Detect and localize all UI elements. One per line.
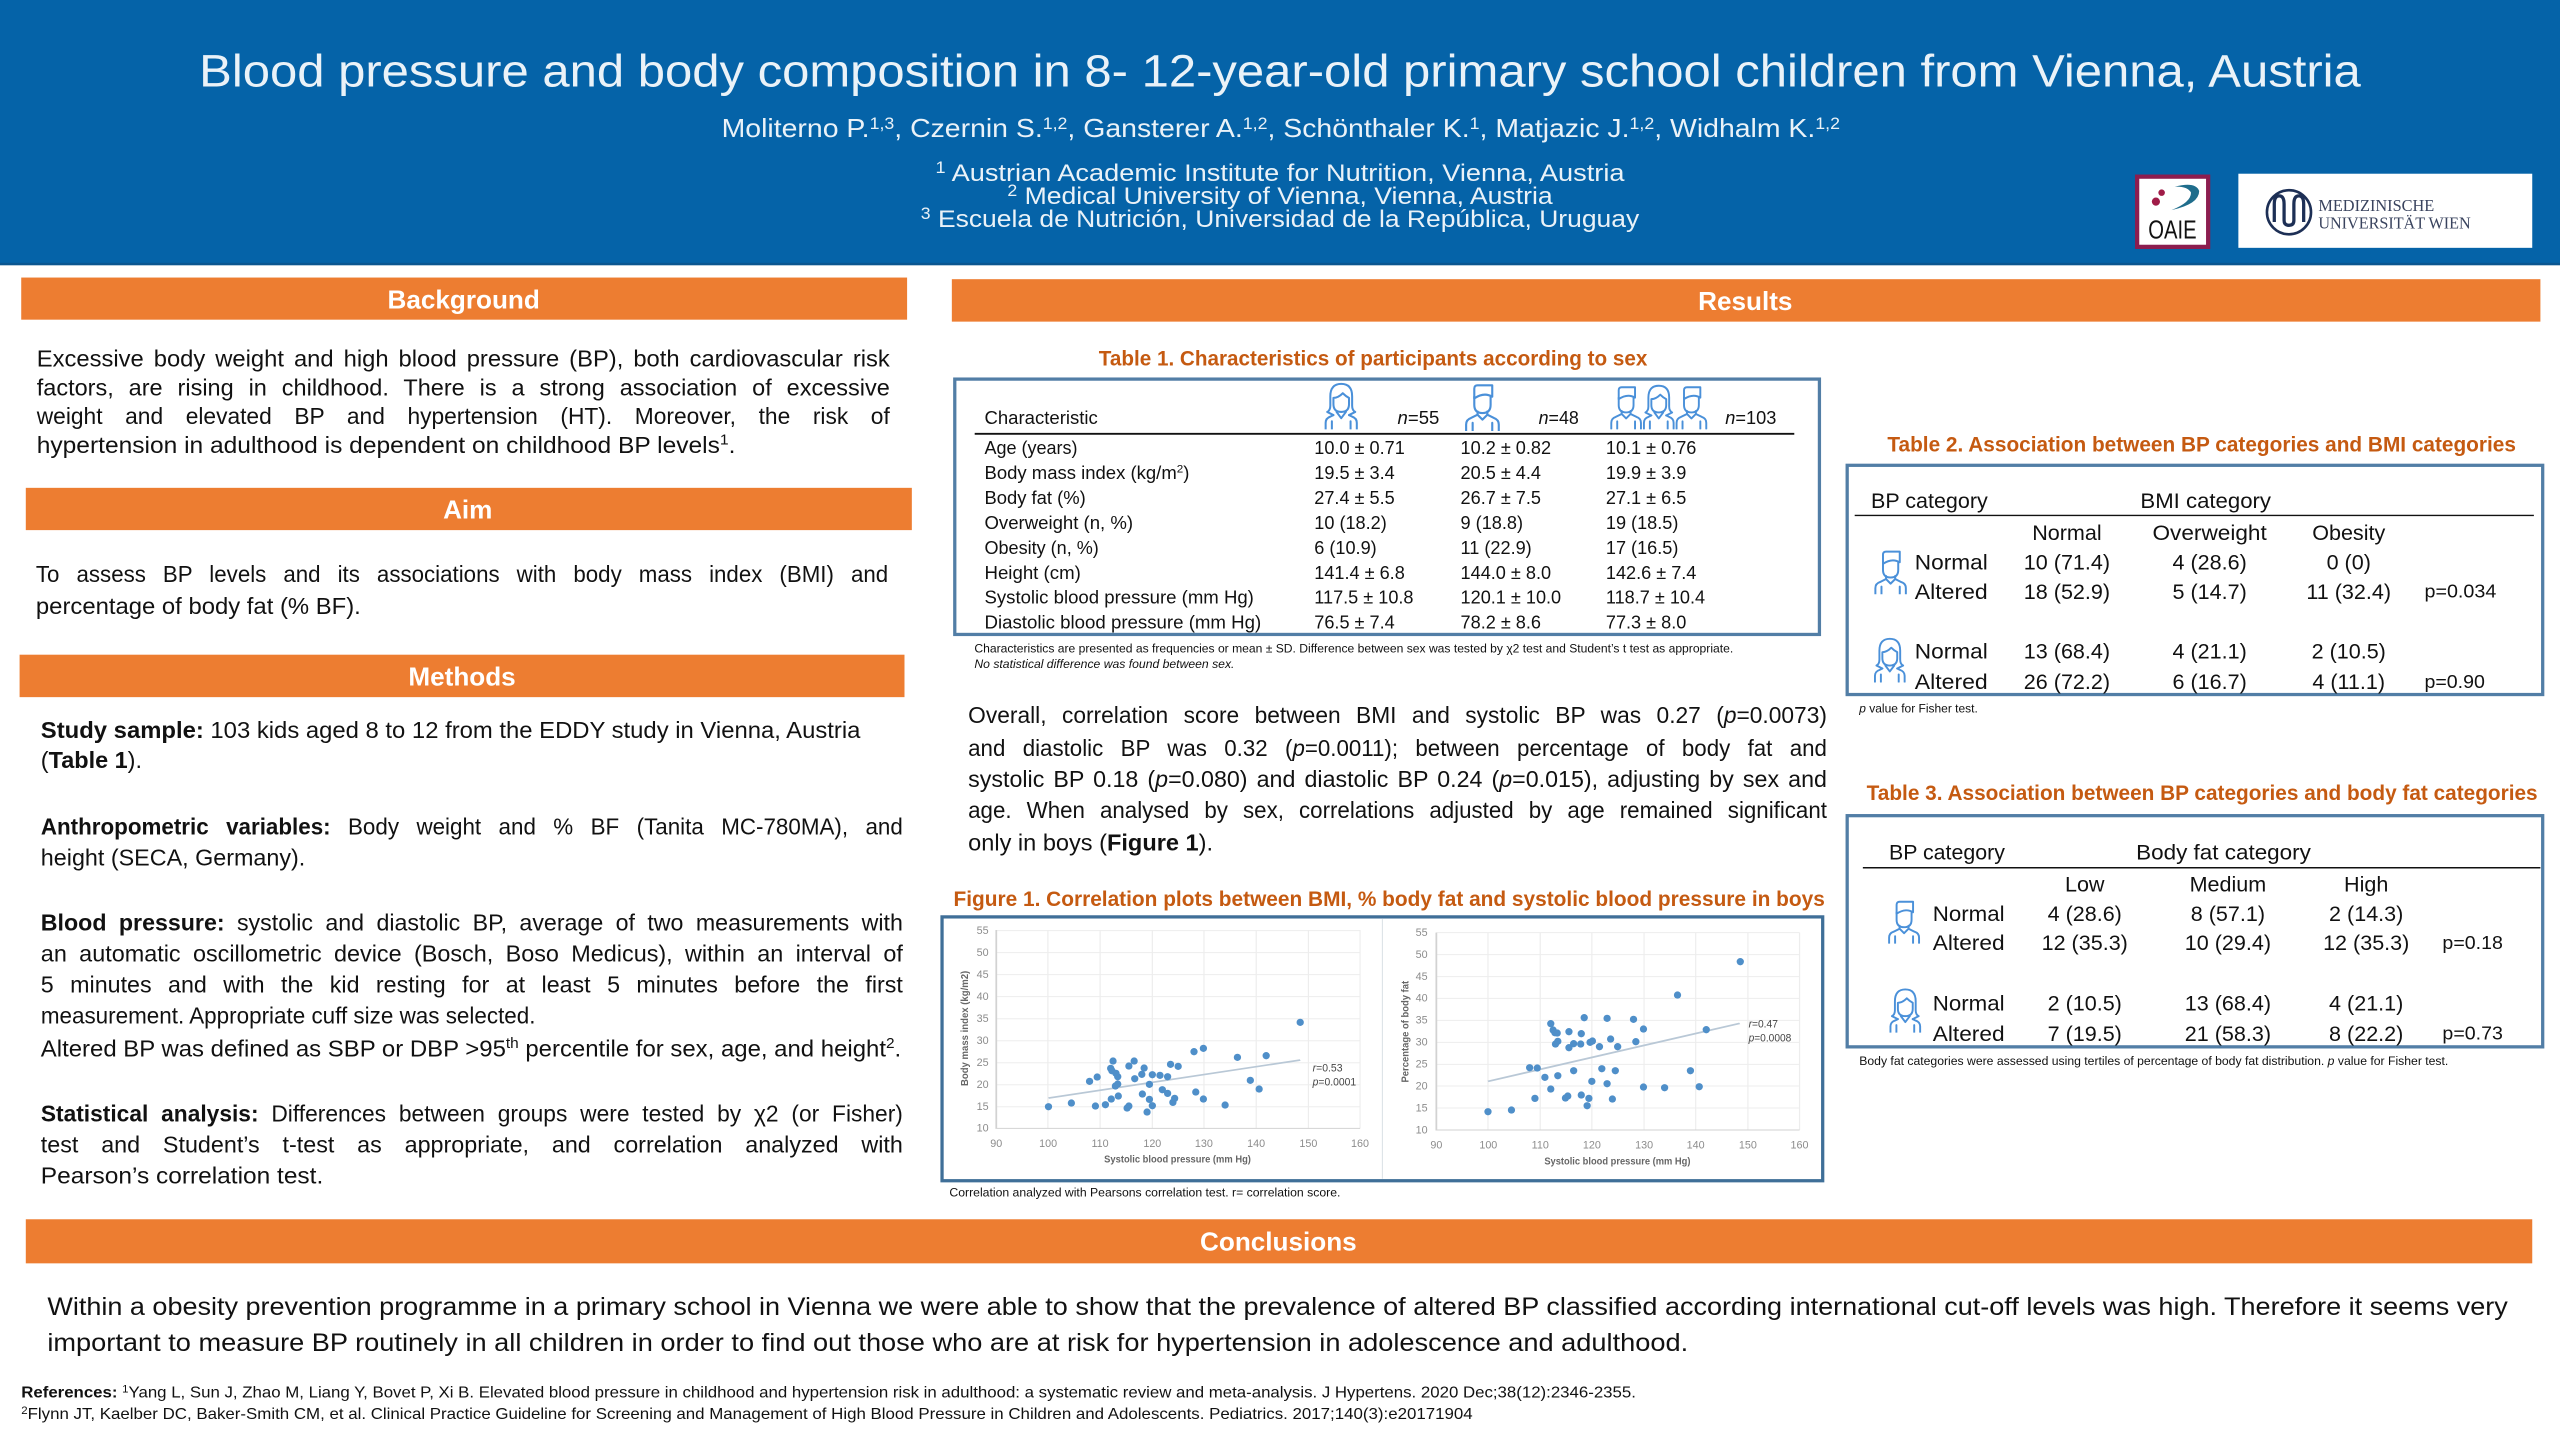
table 3 boys rows: 12 (35.3) [2042,930,2128,955]
scatter plot: body fat vs systolic BP: 140 [1687,1139,1705,1151]
scatter plot: BMI vs systolic BP: 50 [977,947,989,959]
icon: girl [1875,639,1905,682]
scatter plot: BMI vs systolic BP: 90 [990,1138,1002,1150]
scatter plot: body fat vs systolic BP: 150 [1739,1139,1757,1151]
scatter plot: body fat vs systolic BP: 160 [1791,1139,1809,1151]
text block: aim: To assess BP levels and its associations with body mass index (BMI) and [36,561,888,587]
logo: Medizinische Universität Wien: UNIVERSITÄT WIEN [2318,213,2471,232]
table 1 rows: 10 (18.2) [1314,513,1387,533]
text: blood pressure: percentile for sex, age, and height [519,1035,887,1061]
table 3 boys rows: 8 (57.1) [2191,901,2265,926]
scatter plot: body fat vs systolic BP [1400,927,1809,1167]
figure 1: correlation plots [942,917,1823,1181]
table 2 boys rows: 5 (14.7) [2172,579,2247,604]
logo: Medizinische Universität Wien: MEDIZINISCHE [2318,196,2434,215]
table 1 rows: 144.0 ± 8.0 [1461,563,1551,583]
references: References: [21,1385,117,1402]
panel: methods [20,655,904,1189]
table 1 header: n=103 [1725,408,1776,428]
table 1 rows: Age (years) [984,438,1078,458]
text block: aim: percentage of body fat (% BF). [36,593,361,619]
heading: methods [20,655,904,697]
icon: group of three children [1611,386,1706,429]
table 3 header [1889,840,2388,896]
table 1 rows: 142.6 ± 7.4 [1606,563,1696,583]
affiliations [921,159,1640,233]
table 1 footnote: Characteristics are presented as frequencies or mean ± SD. Difference between sex was tested by χ2 test and Student’s t test as appropriate. [974,641,1733,655]
scatter plot: body fat vs systolic BP: 100 [1479,1139,1497,1151]
table 1 rows: 19.9 ± 3.9 [1606,463,1686,483]
table 2 girls rows: Altered [1915,669,1988,694]
table 3 boys rows: Normal [1933,901,2005,926]
text: statistical analysis [41,1101,903,1189]
table 3 boys rows [1933,901,2503,955]
table 1 rows: 10.2 ± 0.82 [1461,438,1551,458]
icon: boy [1466,385,1499,431]
text: study sample: (Table 1). [41,747,142,773]
table 1 rows: 27.4 ± 5.5 [1314,488,1395,508]
scatter plot: BMI vs systolic BP: 45 [977,969,989,981]
table 1 rows: Overweight (n, %) [984,513,1133,533]
scatter plot: body fat vs systolic BP: 50 [1416,949,1428,961]
scatter plot: BMI vs systolic BP: 35 [977,1013,989,1025]
scatter plot: body fat vs systolic BP: 110 [1532,1139,1549,1151]
table 1 rows: 11 (22.9) [1461,538,1532,558]
scatter plot: body fat vs systolic BP: Systolic blood pressure (mm Hg) [1544,1156,1690,1167]
table 3 header: High [2344,871,2388,896]
table 1 header: Characteristic [984,408,1098,428]
scatter plot: BMI vs systolic BP: Body mass index (kg/m2) [960,971,971,1086]
scatter plot: BMI vs systolic BP: Systolic blood pressure (mm Hg) [1104,1154,1251,1165]
text: statistical analysis: Statistical analysis: Differences between groups were tested by χ2 (or Fisher) [41,1101,903,1127]
text block: background: . [729,432,736,458]
table 1 rows: 9 (18.8) [1461,513,1523,533]
text block: conclusions [47,1293,2508,1357]
text block: correlation summary: and diastolic BP was 0.32 (p=0.0011); between percentage of body fat and [968,735,1827,761]
heading: results [952,279,2540,322]
scatter plot: body fat vs systolic BP: 120 [1583,1139,1601,1151]
scatter plot: body fat vs systolic BP: r=0.47 [1749,1018,1778,1030]
logo: Medizinische Universität Wien [2238,174,2532,248]
heading: conclusions [26,1219,2532,1263]
text: statistical analysis: test and Student’s t-test as appropriate, and correlation analyzed with [41,1132,903,1158]
table 3 title: Table 3. Association between BP categories and body fat categories [1867,782,2538,805]
heading: results: Results [1698,286,1792,316]
authors: , Czernin S. [894,113,1043,143]
icon: boy [1875,552,1906,594]
table 1 rows: 19.5 ± 3.4 [1314,463,1395,483]
authors: , Widhalm K. [1654,113,1815,143]
heading: background [21,278,907,320]
scatter plot: body fat vs systolic BP: 130 [1635,1139,1653,1151]
authors: , Matjazic J. [1480,113,1630,143]
table 1 footnote: No statistical difference was found between sex. [974,657,1234,671]
table 1 rows: 118.7 ± 10.4 [1606,588,1705,608]
text: blood pressure: . [895,1035,901,1061]
text: blood pressure: Blood pressure: systolic and diastolic BP, average of two measurements with [41,910,903,936]
affiliations: 3 [921,205,931,223]
table 2 girls rows: 2 (10.5) [2312,639,2386,664]
table 2 title: Table 2. Association between BP categories and BMI categories [1887,433,2516,456]
text: anthropometric variables: Anthropometric variables: Body weight and % BF (Tanita MC-780MA), and [41,813,903,839]
table 3 header: Medium [2190,871,2266,896]
text block: correlation summary: only in boys ( Figure 1). [968,830,1213,856]
table 3 girls rows: 2 (10.5) [2048,991,2122,1016]
text block: background: weight and elevated BP and hypertension (HT). Moreover, the risk of [36,403,890,429]
scatter plot: body fat vs systolic BP: 40 [1416,993,1428,1005]
table 2 header: BMI category [2140,488,2271,513]
table 3 boys rows: 4 (28.6) [2048,901,2122,926]
table 1 rows: 78.2 ± 8.6 [1461,613,1541,633]
table 1 rows: 17 (16.5) [1606,538,1678,558]
scatter plot: BMI vs systolic BP: 150 [1299,1138,1317,1150]
icon: girl [1326,384,1357,429]
scatter plot: BMI vs systolic BP: 25 [977,1057,989,1069]
table 3 girls rows: 7 (19.5) [2048,1021,2122,1046]
table 3 header: Body fat category [2136,840,2311,865]
title: Blood pressure and body composition in 8- 12-year-old primary school children from Vienna, Austria [199,46,2361,97]
table 1 rows: Systolic blood pressure (mm Hg) [984,588,1254,608]
table 1 rows: 19 (18.5) [1606,513,1678,533]
text block: background: 1 [720,433,729,449]
table 3 girls rows: 8 (22.2) [2329,1021,2403,1046]
table 1 rows [984,438,1705,633]
table 2 girls rows: p=0.90 [2424,671,2485,692]
table 1 rows: 10.1 ± 0.76 [1606,438,1696,458]
table 1 rows: 27.1 ± 6.5 [1606,488,1686,508]
authors: 1,2 [1043,115,1067,133]
scatter plot: BMI vs systolic BP: 40 [977,991,989,1003]
table 3 boys rows: Altered [1933,930,2005,955]
text: study sample: Study sample: 103 kids aged 8 to 12 from the EDDY study in Vienna, Austria [41,717,861,743]
table 1 rows: 120.1 ± 10.0 [1461,588,1561,608]
scatter plot: body fat vs systolic BP: 15 [1416,1102,1428,1114]
scatter plot: BMI vs systolic BP [960,925,1369,1165]
scatter plot: body fat vs systolic BP: 10 [1416,1124,1428,1136]
scatter plot: BMI vs systolic BP: p=0.0001 [1312,1076,1356,1088]
affiliations: 1 [936,159,946,177]
authors: 1,2 [1630,115,1654,133]
table 1 rows: Obesity (n, %) [984,538,1099,558]
scatter plot: body fat vs systolic BP: p=0.0008 [1748,1032,1791,1044]
scatter plot: BMI vs systolic BP: 110 [1091,1138,1109,1150]
authors: Moliterno P. [722,113,858,143]
figure 1 footnote: Correlation analyzed with Pearsons correlation test. r= correlation score. [949,1186,1340,1200]
heading: aim [26,488,912,530]
authors: 1,3 [870,115,894,133]
table 2 header: Obesity [2312,520,2385,545]
table 1 rows: 10.0 ± 0.71 [1314,438,1405,458]
scatter plot: body fat vs systolic BP: 20 [1416,1080,1428,1092]
heading: conclusions: Conclusions [1200,1227,1357,1257]
panel: aim [26,488,912,619]
authors: , Gansterer A. [1067,113,1243,143]
table 1 rows: Body mass index (kg/m [984,463,1173,483]
table 3 girls rows: 21 (58.3) [2185,1021,2271,1046]
scatter plot: BMI vs systolic BP: 140 [1247,1138,1265,1150]
text block: background: Excessive body weight and high blood pressure (BP), both cardiovascular risk [37,346,890,372]
text block: correlation summary: Overall, correlation score between BMI and systolic BP was 0.27 (p=0.0073) [968,702,1827,728]
table 1 rows: Body fat (%) [984,488,1086,508]
table 2 boys rows [1915,549,2496,604]
table 2 boys rows: Normal [1915,549,1988,574]
references: Flynn JT, Kaelber DC, Baker-Smith CM, et al. Clinical Practice Guideline for Screening and Management of High Blood Pressure in Children and Adolescents. Pediatrics. 2017;140(3):e20171904 [28,1406,1473,1423]
scatter plot: BMI vs systolic BP: r=0.53 [1313,1063,1343,1075]
table 2 header: BP category [1871,488,1988,513]
table 2 girls rows [1915,639,2485,694]
table 1 rows: 141.4 ± 6.8 [1314,563,1405,583]
table 1 rows: Diastolic blood pressure (mm Hg) [984,613,1261,633]
table 3 girls rows [1933,991,2503,1046]
text: anthropometric variables [41,813,903,870]
text: blood pressure: an automatic oscillometric device (Bosch, Boso Medicus), within an interval of [41,941,904,967]
table 2 footnote: p value for Fisher test. [1858,701,1978,715]
table 3 girls rows: p=0.73 [2442,1023,2503,1044]
scatter plot: BMI vs systolic BP: 10 [977,1123,989,1135]
figure 1 title: Figure 1. Correlation plots between BMI, % body fat and systolic blood pressure in boys [953,888,1825,911]
authors: 1,2 [1815,115,1840,133]
references: 1 [122,1384,129,1396]
table 3 girls rows: Altered [1933,1021,2005,1046]
text: blood pressure: measurement. Appropriate cuff size was selected. [41,1003,536,1029]
scatter plot: BMI vs systolic BP: 20 [977,1079,989,1091]
text: study sample [41,717,861,773]
table 1 rows: 6 (10.9) [1314,538,1377,558]
table 3: BP vs body fat categories [1847,816,2543,1047]
text block: correlation summary: systolic BP 0.18 (p=0.080) and diastolic BP 0.24 ( p=0.015), adjusting by sex and [968,766,1827,792]
table 2 girls rows: 6 (16.7) [2172,669,2247,694]
table 3 boys rows: 12 (35.3) [2323,930,2409,955]
table 2 header [1871,488,2385,545]
scatter plot: BMI vs systolic BP: 30 [977,1035,989,1047]
table 3 boys rows: 2 (14.3) [2329,901,2403,926]
table 2 girls rows: 13 (68.4) [2024,639,2110,664]
table 3 boys rows: p=0.18 [2442,932,2503,953]
table 2 girls rows: 26 (72.2) [2024,669,2110,694]
scatter plot: body fat vs systolic BP: 25 [1416,1059,1428,1071]
logo: OAIE: OAIE [2148,214,2197,244]
table 1: characteristics of participants [955,379,1819,634]
text: blood pressure: 5 minutes and with the kid resting for at least 5 minutes before the first [41,972,904,998]
references: Yang L, Sun J, Zhao M, Liang Y, Bovet P, Xi B. Elevated blood pressure in childhood and hypertension risk in adulthood: a systematic review and meta-analysis. J Hypertens. 2020 Dec;38(12):2346-2355. [129,1385,1636,1402]
heading: aim: Aim [443,494,492,524]
table 1 rows: Height (cm) [984,563,1081,583]
text block: correlation summary: age. When analysed by sex, correlations adjusted by age remained significant [968,797,1828,823]
text block: background [36,346,890,458]
text: statistical analysis: Pearson’s correlation test. [41,1163,323,1189]
table 1 header: n=48 [1539,408,1579,428]
table 2 boys rows: 18 (52.9) [2024,579,2110,604]
scatter plot: body fat vs systolic BP: 30 [1416,1037,1428,1049]
table 3 girls rows: 4 (21.1) [2329,991,2403,1016]
table 1 rows: ) [1183,463,1189,483]
table 3 boys rows: 10 (29.4) [2185,930,2271,955]
scatter plot: body fat vs systolic BP: Percentage of body fat [1400,980,1411,1083]
references [21,1384,1636,1423]
table 1 rows: 2 [1177,463,1183,475]
table 2 header: Overweight [2152,520,2267,545]
text block: background: hypertension in adulthood is dependent on childhood BP levels [37,432,673,458]
text block: background: factors, are rising in childhood. There is a strong association of excessive [37,374,890,400]
authors: 1 [1470,115,1480,133]
table 2 boys rows: Altered [1915,579,1988,604]
header band [0,0,2560,265]
icon: boy [1889,902,1919,944]
icon: girl [1890,989,1920,1032]
table 2: BP vs BMI categories [1847,465,2543,695]
scatter plot: body fat vs systolic BP: 35 [1416,1015,1428,1027]
scatter plot: BMI vs systolic BP: 15 [977,1101,989,1113]
table 1 rows: 117.5 ± 10.8 [1314,588,1414,608]
heading: background: Background [388,285,540,315]
text block: aim [36,561,888,619]
scatter plot: BMI vs systolic BP: 130 [1195,1138,1213,1150]
text block: conclusions: Within a obesity prevention programme in a primary school in Vienna we were able to show that the prevalence of altered BP classified according international cut-off levels was high. Therefore it seems very [47,1293,2508,1321]
affiliations: 2 [1007,182,1017,200]
table 3 girls rows: Normal [1933,991,2005,1016]
table 2 header: Normal [2032,520,2102,545]
table 1 rows: 76.5 ± 7.4 [1314,613,1395,633]
table 1 rows: 20.5 ± 4.4 [1461,463,1541,483]
text: blood pressure: Altered BP was defined as SBP or DBP >95 [41,1035,485,1061]
authors: , Schönthaler K. [1267,113,1470,143]
panel: conclusions [26,1219,2532,1357]
heading: methods: Methods [408,662,516,692]
table 1 header: n=55 [1398,408,1439,428]
table 3 header: BP category [1889,840,2005,865]
logo: OAIE [2137,177,2208,247]
affiliations: Medical University of Vienna, Vienna, Austria [1017,183,1553,210]
affiliations: Austrian Academic Institute for Nutrition, Vienna, Austria [946,160,1625,187]
text: blood pressure: th [506,1036,519,1052]
scatter plot: BMI vs systolic BP: 160 [1351,1138,1369,1150]
table 2 boys rows: 4 (28.6) [2172,549,2247,574]
table 2 girls rows: 4 (11.1) [2312,669,2385,694]
table 2 boys rows: 10 (71.4) [2024,549,2110,574]
scatter plot: BMI vs systolic BP: 120 [1143,1138,1161,1150]
table 2 boys rows: p=0.034 [2424,581,2496,602]
table 1 rows: 26.7 ± 7.5 [1461,488,1541,508]
scatter plot: body fat vs systolic BP: 55 [1416,927,1428,939]
text: anthropometric variables: height (SECA, Germany). [41,844,305,870]
scatter plot: BMI vs systolic BP: 100 [1039,1138,1057,1150]
table 2 boys rows: 11 (32.4) [2306,579,2391,604]
table 3 footnote: Body fat categories were assessed using tertiles of percentage of body fat distribution. p value for Fisher test. [1859,1054,2448,1068]
table 1 footnote [974,641,1733,671]
table 1 header [984,408,1776,428]
table 2 girls rows: 4 (21.1) [2172,639,2247,664]
table 1 title: Table 1. Characteristics of participants according to sex [1099,348,1648,371]
scatter plot: body fat vs systolic BP: 45 [1416,971,1428,983]
scatter plot: body fat vs systolic BP: 90 [1430,1139,1442,1151]
text: blood pressure: 2 [886,1036,895,1052]
table 3 header: Low [2065,871,2105,896]
panel: background [21,278,907,458]
scatter plot: BMI vs systolic BP: 55 [977,925,989,937]
text block: correlation summary [968,702,1828,856]
table 2 boys rows: 0 (0) [2327,549,2371,574]
text: blood pressure [41,910,904,1061]
table 2 girls rows: Normal [1915,639,1988,664]
authors: 1,2 [1243,115,1267,133]
text block: conclusions: important to measure BP routinely in all children in order to find out those who are at risk for hypertension in adolescence and adulthood. [47,1329,1688,1357]
affiliations: Escuela de Nutrición, Universidad de la República, Uruguay [931,206,1640,233]
table 1 rows: 77.3 ± 8.0 [1606,613,1686,633]
table 3 girls rows: 13 (68.4) [2185,991,2271,1016]
references: 2 [21,1405,28,1417]
